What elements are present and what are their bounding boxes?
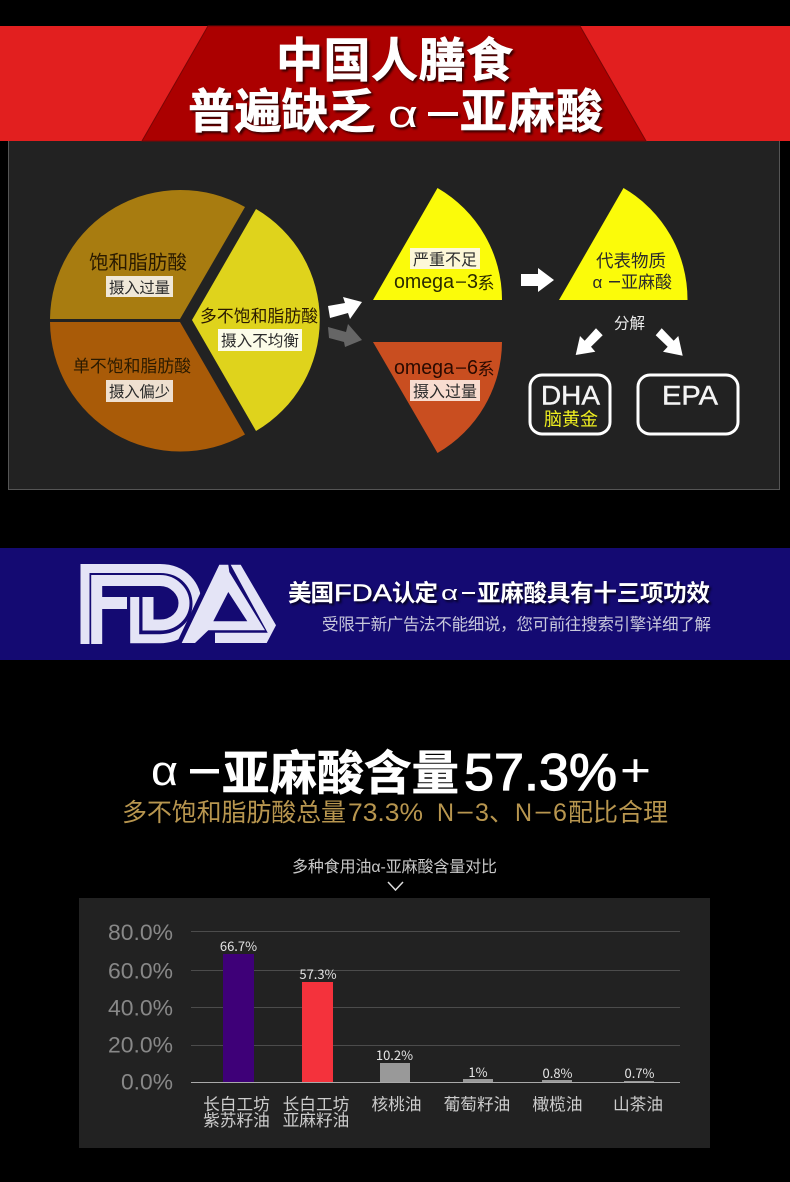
label: decomposes: 分解 xyxy=(614,314,645,332)
title: 普遍缺乏 xyxy=(188,85,375,138)
category labels: 紫苏籽油 xyxy=(203,1111,270,1130)
category labels: 葡萄籽油 xyxy=(444,1095,510,1114)
FDA headline: 亚麻酸具有十三项功效 xyxy=(477,580,710,606)
pie slice: monounsaturated fat: 摄入偏少 xyxy=(109,383,170,401)
title: α xyxy=(388,94,418,136)
box: DHA: DHA xyxy=(541,380,600,410)
pie chart: dietary fats xyxy=(50,190,320,452)
header banner xyxy=(0,26,790,141)
sub headline: 多不饱和脂肪酸总量 xyxy=(122,799,346,827)
value labels: 10.2% xyxy=(376,1045,413,1064)
FDA headline: α xyxy=(441,583,458,605)
FDA headline xyxy=(288,580,710,607)
label: omega-6: 系 xyxy=(478,360,494,379)
y axis labels: 60.0% xyxy=(108,958,173,984)
box: EPA: EPA xyxy=(662,380,718,410)
trapezoid xyxy=(142,26,646,141)
main headline: α xyxy=(151,747,178,794)
value labels xyxy=(220,936,655,1082)
label: omega-6: omega xyxy=(394,357,455,379)
FDA banner xyxy=(0,548,790,660)
icon: chevron xyxy=(388,882,403,890)
category labels: 橄榄油 xyxy=(532,1095,583,1114)
label: omega-6: − xyxy=(455,358,467,378)
value labels: 0.7% xyxy=(624,1063,655,1082)
y axis labels: 20.0% xyxy=(108,1032,173,1058)
value labels: 1% xyxy=(468,1062,488,1081)
title xyxy=(188,34,603,138)
value labels: 57.3% xyxy=(299,964,337,983)
y axis labels xyxy=(108,920,173,1094)
sub headline: − xyxy=(456,799,474,827)
label: omega-3: 系 xyxy=(478,274,494,293)
sub headline: N xyxy=(515,799,532,827)
FDA note: 受限于新广告法不能细说，您可前往搜索引擎详细了解 xyxy=(322,615,711,634)
wedge: representative substance xyxy=(559,188,688,300)
arrow: gray to omega-6 xyxy=(328,324,362,347)
category labels: 长白工坊 xyxy=(283,1095,349,1114)
arrow: to EPA xyxy=(656,328,683,356)
box: EPA xyxy=(638,375,738,434)
sub headline xyxy=(122,799,668,827)
wedge: omega-6: 摄入过量 xyxy=(413,383,477,401)
wedge: representative substance: α xyxy=(592,273,602,292)
category labels: 亚麻籽油 xyxy=(283,1111,349,1130)
category labels: 山茶油 xyxy=(613,1095,663,1114)
pie slice: polyunsaturated fat: 摄入不均衡 xyxy=(221,332,299,350)
pie slice: saturated fat: 饱和脂肪酸 xyxy=(89,252,187,274)
label: omega-3: 3 xyxy=(467,271,478,293)
wedge: omega-6 xyxy=(373,342,502,453)
arrow: to DHA xyxy=(576,328,603,355)
sub headline: N xyxy=(437,799,454,827)
pie slice: saturated fat: 摄入过量 xyxy=(109,279,170,297)
chart caption: 多种食用油α-亚麻酸含量对比 xyxy=(292,858,497,876)
bars xyxy=(223,954,654,1082)
pie slice: polyunsaturated fat xyxy=(192,209,320,431)
sub headline: 、 xyxy=(489,799,514,827)
main headline xyxy=(151,744,651,802)
label: omega-6: 6 xyxy=(467,357,478,379)
title: 中国人膳食 xyxy=(276,34,513,87)
label: omega-6 xyxy=(394,357,494,379)
box: DHA: 脑黄金 xyxy=(544,410,598,430)
value labels: 66.7% xyxy=(220,936,257,955)
sub headline: − xyxy=(534,799,552,827)
arrow: white to omega-3 xyxy=(328,297,362,319)
FDA headline: 美国 xyxy=(288,580,334,606)
main headline: 亚麻酸含量 xyxy=(222,748,459,801)
wedge: representative substance: 亚麻酸 xyxy=(621,273,672,292)
y axis labels: 40.0% xyxy=(108,996,173,1020)
bar chart: oil comparison xyxy=(79,898,710,1148)
value labels: 0.8% xyxy=(542,1063,573,1082)
pie slice: saturated fat xyxy=(50,190,245,319)
panel: fatty acid diagram xyxy=(8,135,780,490)
sub headline: 73.3% xyxy=(348,799,423,827)
label: omega-3 xyxy=(394,271,494,293)
arrow: omega-3 to alpha-linolenic acid xyxy=(521,268,554,292)
main headline: + xyxy=(620,744,651,796)
pie slice: polyunsaturated fat: 多不饱和脂肪酸 xyxy=(200,307,318,326)
wedge: omega-3 xyxy=(373,188,502,300)
pie slice: monounsaturated fat: 单不饱和脂肪酸 xyxy=(73,357,191,376)
FDA headline: 认定 xyxy=(392,580,438,606)
y axis labels: 0.0% xyxy=(121,1070,173,1094)
label: omega-3: omega xyxy=(394,271,455,293)
label: omega-3: − xyxy=(455,272,467,292)
main headline: 57.3% xyxy=(464,744,617,802)
sub headline: 6 xyxy=(553,799,567,827)
box: DHA xyxy=(530,375,610,434)
wedge: representative substance: 代表物质 xyxy=(596,251,666,271)
category labels xyxy=(203,1095,663,1130)
FDA headline: FDA xyxy=(334,580,392,607)
title: 亚麻酸 xyxy=(460,85,603,138)
sub headline: 3 xyxy=(475,799,489,827)
category labels: 核桃油 xyxy=(371,1095,422,1114)
wedge: omega-3: 严重不足 xyxy=(413,251,477,269)
category labels: 长白工坊 xyxy=(203,1095,270,1114)
sub headline: 配比合理 xyxy=(568,799,668,827)
icon: FDA logo xyxy=(85,564,276,646)
pie slice: monounsaturated fat xyxy=(50,322,245,452)
y axis labels: 80.0% xyxy=(108,920,173,945)
